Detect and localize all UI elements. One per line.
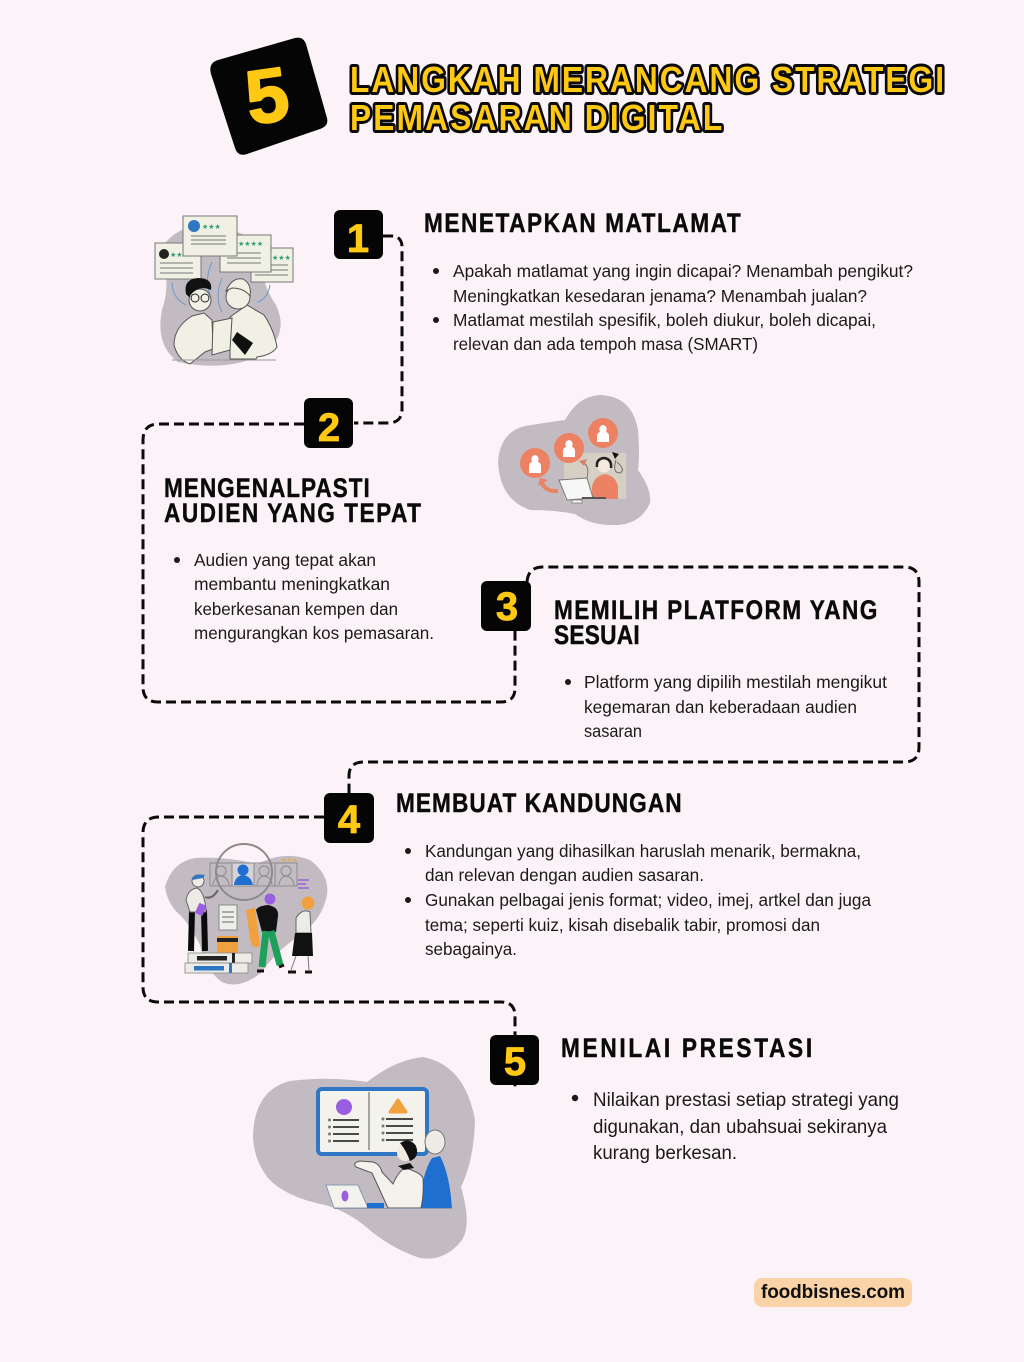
step 3 text: Platform yang dipilih mestilah mengikut [584,672,887,692]
step 1 illustration: ★★★ [202,223,221,231]
step 4 badge: 4 [338,798,361,842]
step 2 text: mengurangkan kos pemasaran. [194,623,434,643]
step 2 illustration [498,395,650,525]
step 1 illustration: ★★ [170,251,183,259]
step 2 text: membantu meningkatkan [194,574,390,594]
step 3 text: sasaran [584,721,642,741]
step 1 text: Apakah matlamat yang ingin dicapai? Menambah pengikut? [453,261,913,281]
step 5 panel [253,1033,899,1259]
step 5 text: digunakan, dan ubahsuai sekiranya [593,1116,887,1138]
title heading: LANGKAH MERANCANG STRATEGI [350,60,944,100]
title block [210,38,944,155]
step 1 text: relevan dan ada tempoh masa (SMART) [453,334,758,354]
step 4 text: sebagainya. [425,939,517,959]
step 4 text: Kandungan yang dihasilkan haruslah menarik, bermakna, [425,841,861,861]
big number 5 badge [210,38,327,155]
title heading [350,60,944,138]
step 4 illustration [165,844,327,984]
dashed connector path [143,236,919,1087]
step 4 illustration: ★★★ [281,857,297,864]
step 4 badge [324,793,374,843]
step 1 text: Meningkatkan kesedaran jenama? Menambah jualan? [453,286,867,306]
step 3 text [565,672,887,741]
step 2 text [174,550,434,643]
step 5 badge: 5 [504,1040,526,1084]
step 4 panel [165,788,871,984]
step 2 badge: 2 [318,406,340,450]
step 1 illustration [155,216,293,366]
step 5 badge [490,1035,539,1085]
step 4 text: dan relevan dengan audien sasaran. [425,865,704,885]
step 2 text: keberkesanan kempen dan [194,599,398,619]
step 3 heading: SESUAI [554,620,640,650]
step 5 text [572,1089,899,1164]
title heading: PEMASARAN DIGITAL [350,98,722,138]
step 2 badge [304,398,353,450]
step 3 heading: MEMILIH PLATFORM YANG [554,595,877,625]
step 2 text: Audien yang tepat akan [194,550,376,570]
big number 5 badge: 5 [240,51,294,142]
step 5 text: kurang berkesan. [593,1142,737,1164]
step 4 heading: MEMBUAT KANDUNGAN [396,788,682,818]
step 1 illustration: ★★★★ [238,240,263,248]
step 1 illustration: ★★★ [272,254,291,262]
step 1 heading: MENETAPKAN MATLAMAT [424,208,741,238]
step 1 text: Matlamat mestilah spesifik, boleh diukur, boleh dicapai, [453,310,876,330]
step 1 panel [155,208,913,366]
step 2 heading: AUDIEN YANG TEPAT [164,498,421,528]
step 3 badge [481,581,531,631]
step 1 badge: 1 [347,217,369,261]
step 3 badge: 3 [496,585,518,629]
step 1 text [433,261,913,354]
step 2 heading [164,473,421,528]
step 3 panel [481,581,887,741]
footer website label: foodbisnes.com [761,1282,905,1303]
step 1 badge [334,210,383,261]
step 3 text: kegemaran dan keberadaan audien [584,697,857,717]
step 3 heading [554,595,877,650]
step 2 heading: MENGENALPASTI [164,473,370,503]
step 5 heading: MENILAI PRESTASI [561,1033,812,1063]
step 5 illustration [253,1057,475,1259]
step 2 panel [164,395,650,643]
step 5 text: Nilaikan prestasi setiap strategi yang [593,1089,899,1111]
footer website label [754,1278,912,1307]
step 4 text: Gunakan pelbagai jenis format; video, imej, artkel dan juga [425,890,871,910]
step 4 text [405,841,871,959]
step 4 text: tema; seperti kuiz, kisah disebalik tabir, promosi dan [425,915,820,935]
